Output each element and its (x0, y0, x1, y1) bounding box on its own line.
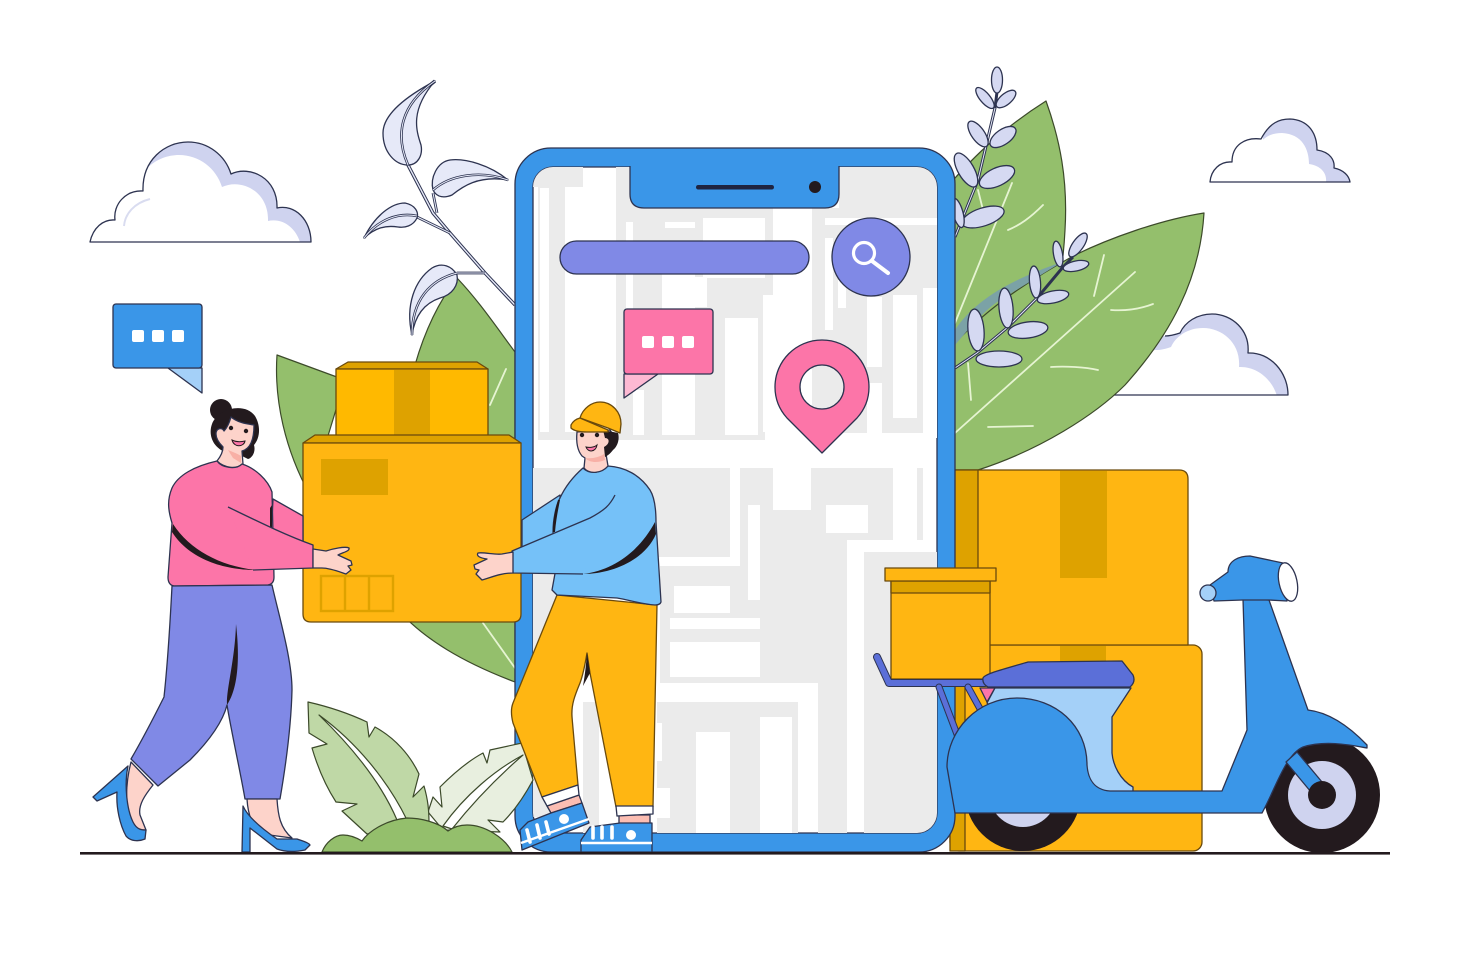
man front arm (512, 495, 615, 574)
map pin (775, 340, 869, 453)
woman pants (131, 585, 292, 799)
parcel: small top box (336, 362, 488, 439)
man front shoe (581, 823, 652, 852)
scooter fork (1286, 752, 1322, 792)
woman eyes and smile (228, 426, 248, 463)
scooter handlebar head (1210, 556, 1287, 601)
woman back arm (270, 499, 303, 560)
character: woman (93, 399, 352, 852)
plant: left large green leaves (277, 278, 515, 682)
plant: left vine with pale leaves (364, 81, 515, 335)
woman front arm (228, 507, 313, 570)
man back leg and front leg (512, 595, 657, 807)
man cap (571, 402, 621, 433)
woman face and neck (216, 417, 254, 468)
man hand (474, 552, 513, 580)
delivery box on scooter rack (885, 568, 996, 679)
man back arm (522, 495, 562, 548)
phone notch (630, 166, 839, 208)
phone camera (809, 181, 821, 193)
plant: lavender sprig upper (949, 67, 1020, 237)
cloud: right behind leaf (1114, 313, 1289, 396)
plant: pale feather leaf (428, 743, 533, 832)
plant: lavender sprig lower (955, 230, 1091, 368)
phone screen map (533, 167, 937, 833)
illustration: package delivery with phone map (80, 66, 1390, 855)
search button with magnifier icon (832, 218, 910, 296)
scooter rear wheel (965, 735, 1081, 851)
search bar (560, 241, 809, 274)
plant: light green feather leaf (308, 702, 429, 834)
woman back foot and heel (93, 762, 153, 841)
man eyes and smile (580, 433, 605, 462)
man bag strap (553, 500, 656, 574)
man hair (603, 430, 619, 457)
phone (515, 148, 955, 852)
ground line (80, 852, 1390, 855)
scooter tail light (980, 688, 995, 702)
scooter grip (1200, 585, 1216, 601)
woman hand (313, 547, 352, 574)
woman front foot and heel (242, 799, 310, 852)
man sweater (552, 466, 661, 605)
scooter headlight (1275, 561, 1301, 603)
man socks and cuffs (542, 785, 653, 824)
cloud: top right (1209, 118, 1351, 183)
boxes: stacked large parcels behind phone (950, 470, 1202, 851)
cloud: top left (89, 141, 312, 243)
scooter inner panel (987, 688, 1133, 795)
character: delivery man (474, 402, 661, 852)
speech bubble: blue (113, 304, 202, 393)
phone speaker (696, 185, 774, 190)
scooter front wheel (1264, 737, 1380, 853)
small plants at phone base (308, 702, 533, 852)
parcel: large box (303, 435, 521, 622)
woman sweater (168, 461, 274, 586)
plant: bush (322, 818, 512, 852)
scooter seat (983, 661, 1134, 687)
scooter body (947, 599, 1367, 813)
woman hair (210, 399, 259, 459)
scooter rack (877, 657, 985, 737)
man neck and face (577, 430, 615, 472)
plant: right large green leaves (940, 101, 1204, 470)
speech bubble: pink (624, 309, 713, 398)
scooter (877, 556, 1380, 853)
woman bag strap (172, 505, 272, 570)
stacked parcels carried (303, 362, 521, 622)
man back shoe (520, 803, 589, 850)
